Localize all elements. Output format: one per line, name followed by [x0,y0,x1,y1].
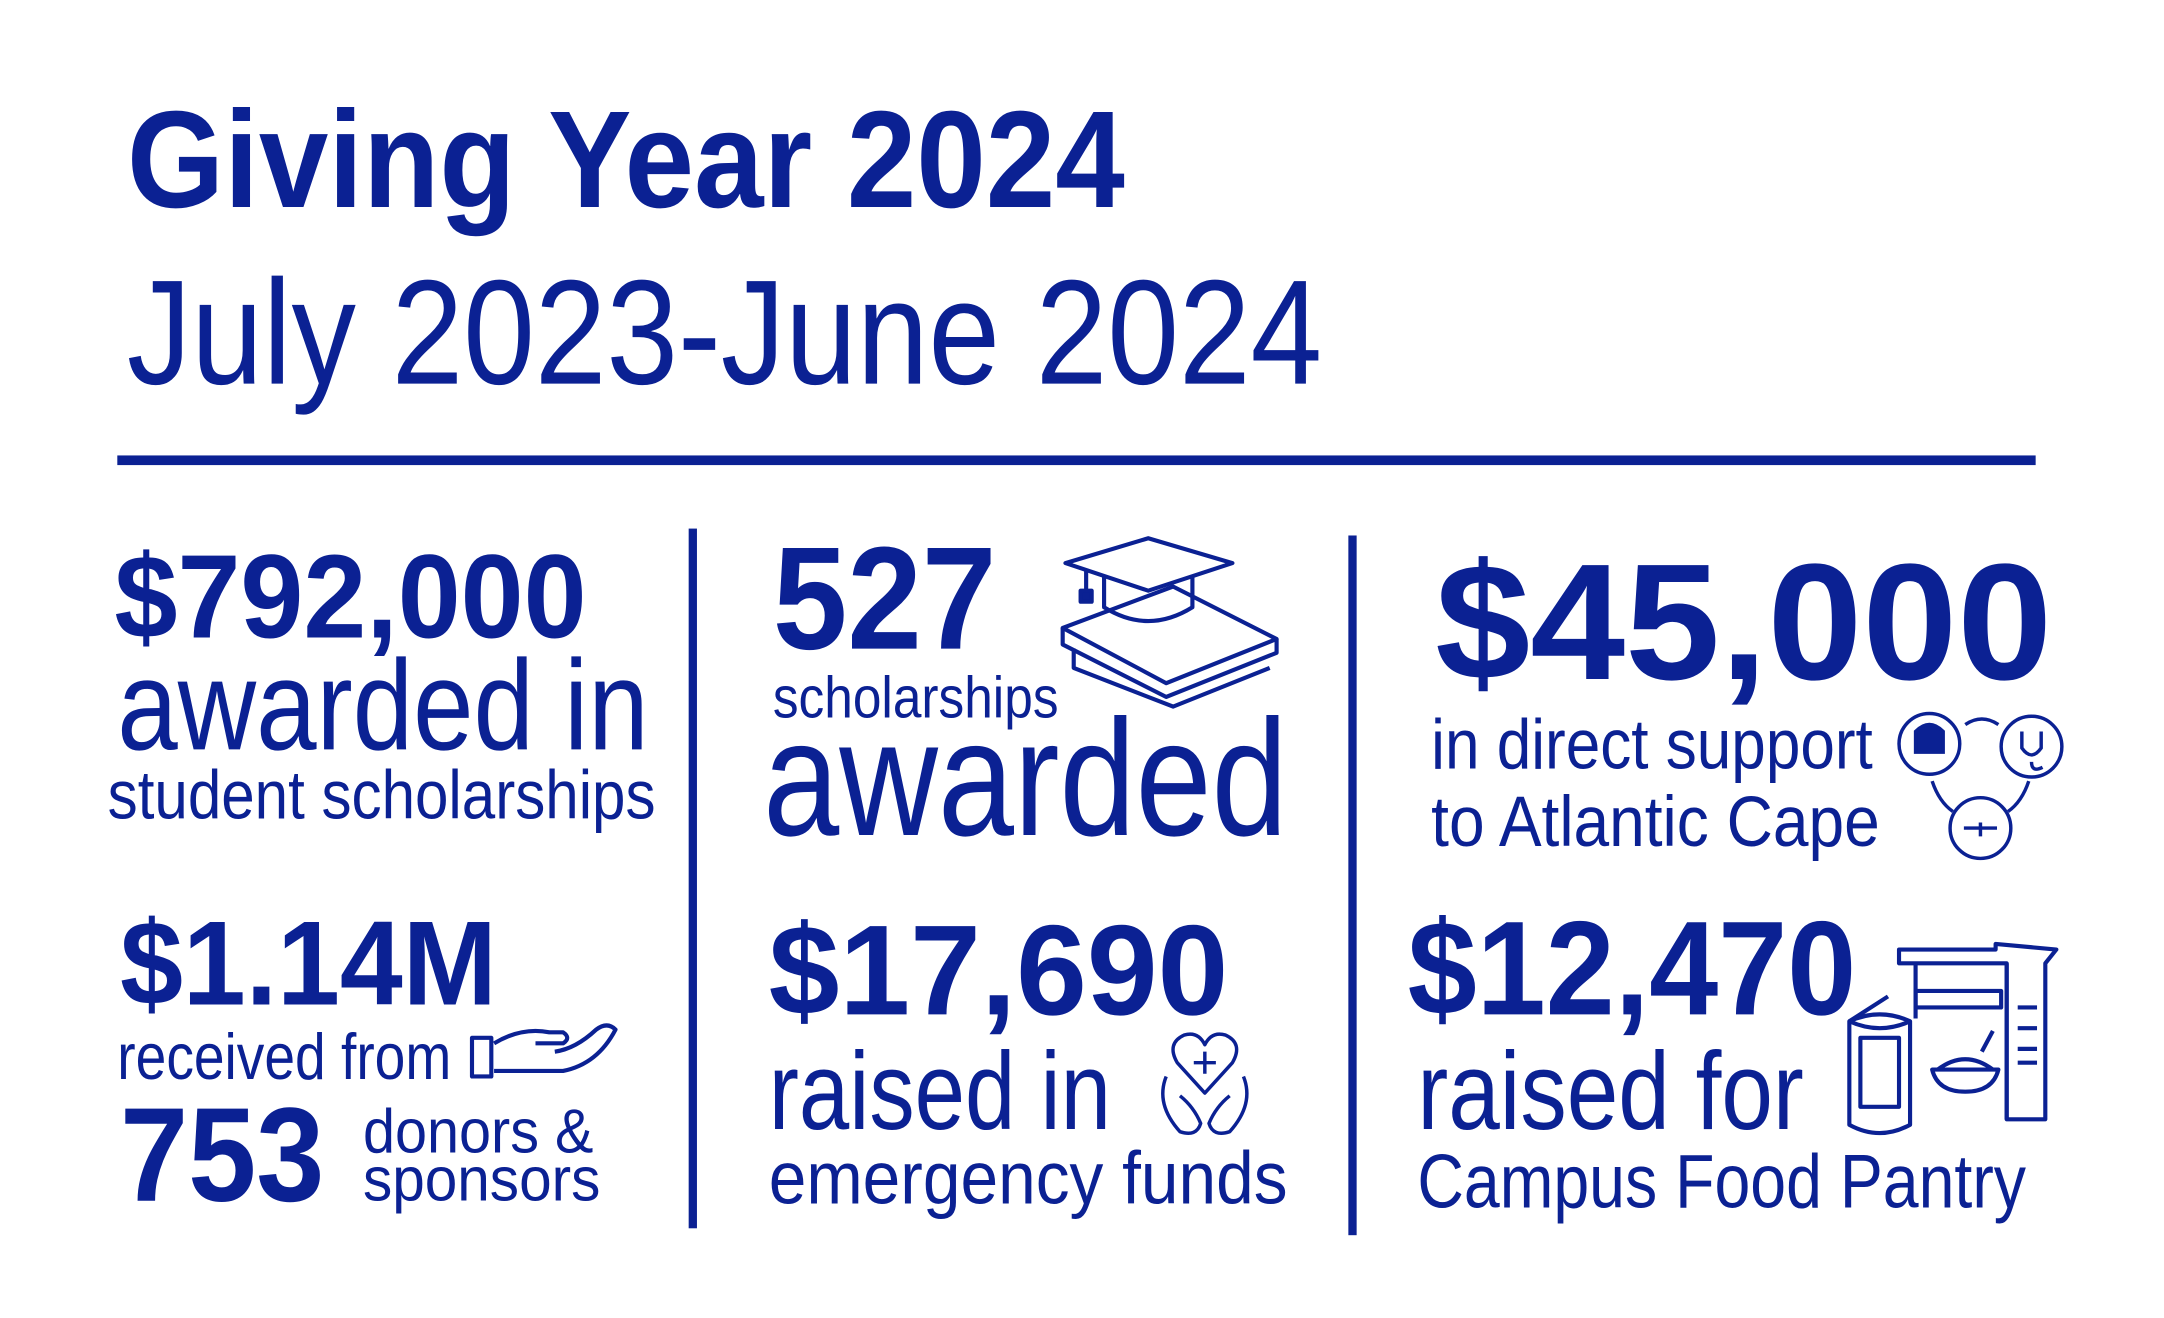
stat: food pantry: raised for [1417,1030,1804,1153]
stat: food pantry [1408,894,2026,1225]
stat: direct support: in direct support [1431,705,1873,784]
stat: scholarships count [763,518,1288,871]
stat: emergency funds [769,899,1288,1219]
stat: scholarships amount: $792,000 [115,532,587,664]
stat: emergency funds: raised in [769,1030,1111,1153]
stat: direct support: to Atlantic Cape [1431,782,1880,862]
icon: food pantry [1849,944,2056,1133]
title: Giving Year 2024 [127,83,1125,237]
stat: direct support [1431,530,2052,862]
stat: donors: donors & [363,1097,593,1166]
stat: scholarships amount: student scholarships [108,756,656,833]
stat: scholarships count: scholarships [773,667,1059,731]
stat: scholarships amount: awarded in [117,634,649,777]
stat: scholarships count: 527 [773,518,996,681]
stat: food pantry: Campus Food Pantry [1417,1140,2026,1225]
stat: scholarships amount [108,532,656,833]
stat: donors: $1.14M [120,897,497,1031]
subtitle: July 2023-June 2024 [127,249,1322,416]
icon: giving hand [472,1025,616,1076]
stat: scholarships count: awarded [763,686,1288,871]
stat: donors: sponsors [363,1146,600,1215]
icon: graduation cap and books [1063,538,1277,707]
stat: donors [117,897,600,1230]
icon: three circles [1899,714,2062,858]
stat: food pantry: $12,470 [1408,894,1856,1043]
stat: direct support: $45,000 [1435,530,2052,715]
stat: emergency funds: emergency funds [769,1136,1288,1219]
stat: donors: received from [117,1020,451,1093]
icon: heart in hands [1163,1034,1247,1133]
stat: emergency funds: $17,690 [769,899,1228,1042]
stat: donors: 753 [120,1081,324,1230]
